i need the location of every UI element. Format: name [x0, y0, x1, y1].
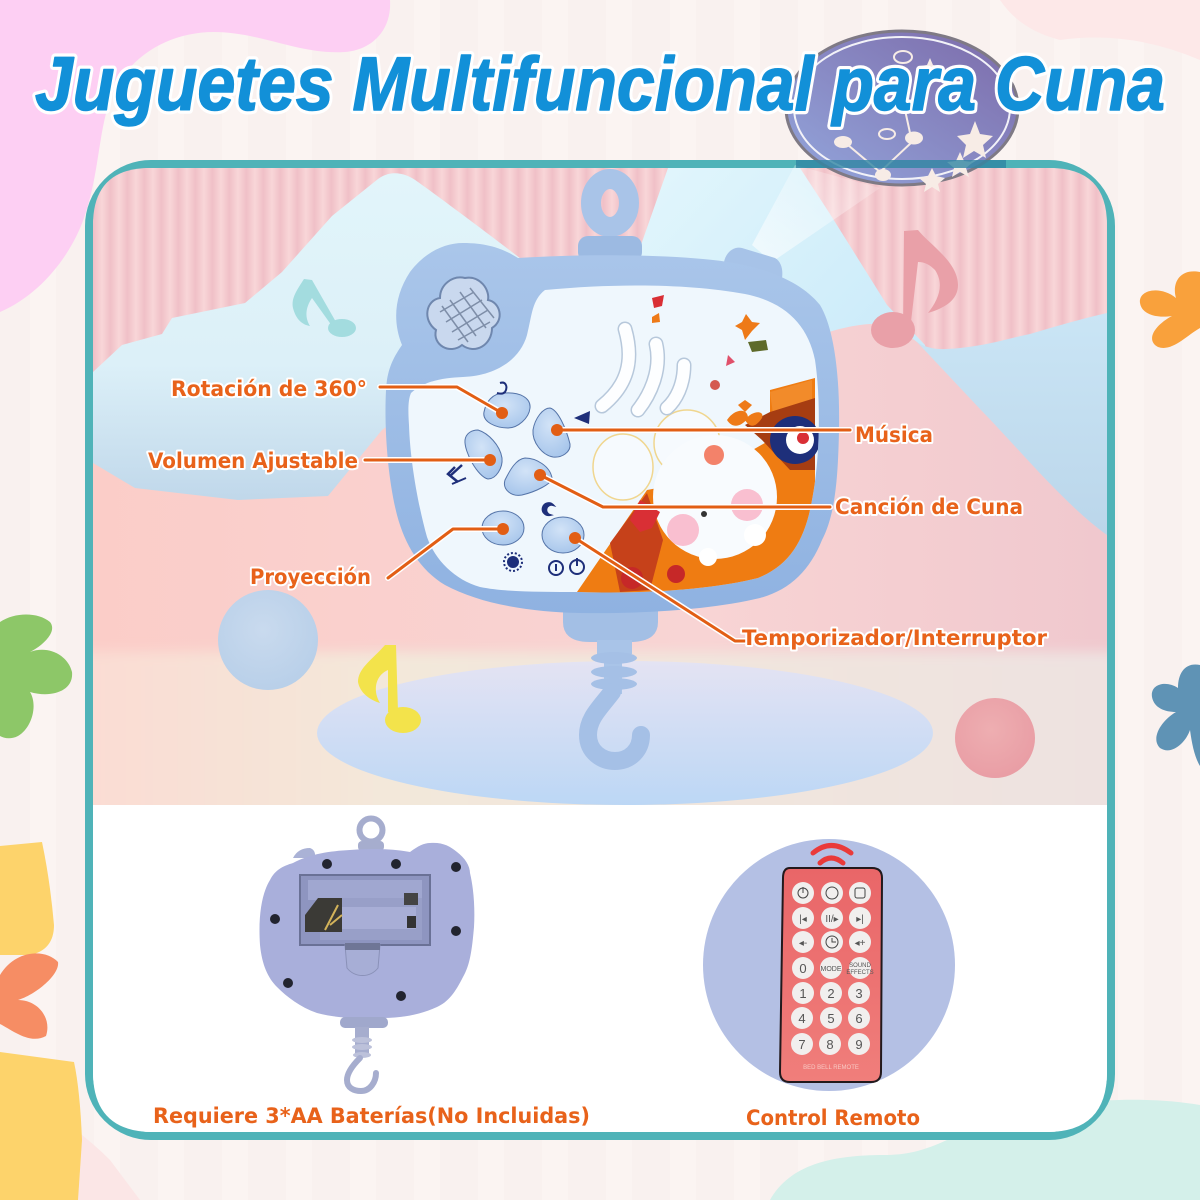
- toy: main body: [385, 243, 839, 613]
- toy: speaker flower grille: [427, 277, 500, 349]
- remote: body: ▸|: [856, 914, 864, 925]
- ball: pink: [955, 698, 1035, 778]
- icon: yellow music note: [358, 645, 421, 733]
- remote: body: 8: [826, 1037, 834, 1052]
- decorative blocks: yellow and orange left: [0, 842, 82, 1200]
- remote: body: BED BELL REMOTE: [803, 1065, 859, 1071]
- label: Rotación de 360°: Rotación de 360°: [171, 377, 367, 401]
- remote: body: MODE: [820, 966, 842, 973]
- remote: body: II/▸: [825, 914, 839, 925]
- decorative leaf: blue right: [1152, 664, 1200, 766]
- remote: signal arcs: [813, 846, 851, 863]
- decorative leaf: orange right: [1140, 271, 1200, 348]
- label: Temporizador/Interruptor: Temporizador/Interruptor: [742, 626, 1048, 650]
- icon: teal music note: [293, 279, 356, 337]
- icon: pink music note: [871, 230, 958, 348]
- remote: body: 1: [799, 986, 807, 1001]
- callout lines: orange strokes and dots: [365, 387, 850, 641]
- label: Canción de Cuna: Canción de Cuna: [835, 495, 1023, 519]
- decorative shape: pink blob top left: [0, 0, 390, 312]
- caption: batteries: Requiere 3*AA Baterías(No Incluidas): [153, 1104, 590, 1128]
- remote: body: 5: [827, 1011, 835, 1026]
- remote: body: SOUND: [849, 963, 871, 969]
- toy: lower hook: [563, 605, 658, 761]
- remote: body: 0: [799, 961, 807, 976]
- toy rear view: battery compartment: [259, 818, 474, 1091]
- remote: body: ◂+: [855, 938, 866, 949]
- teal frame overlap on projection: [796, 160, 1006, 168]
- remote: body: 6: [855, 1011, 863, 1026]
- callout lines: [365, 387, 850, 641]
- remote: lavender circle: [703, 839, 955, 1091]
- remote: body: [780, 868, 882, 1082]
- remote: body: 2: [827, 986, 835, 1001]
- remote: body: 4: [798, 1011, 806, 1026]
- illustration: star projection circle: [786, 31, 1018, 192]
- toy: control buttons: [465, 393, 584, 553]
- panel: teal frame: [89, 164, 1111, 1136]
- scene: pastel room background: [80, 168, 1120, 822]
- remote: body: EFFECTS: [846, 970, 874, 976]
- table: round pedestal: [317, 661, 933, 805]
- caption: remote: Control Remoto: [746, 1106, 920, 1130]
- toy: speaker slots: [602, 329, 684, 410]
- toy: hanging ring: [578, 179, 642, 262]
- decorative leaf: green left: [0, 614, 72, 738]
- ball: blue: [218, 590, 318, 690]
- toy: projector knob: [724, 248, 782, 283]
- label: Proyección: Proyección: [250, 565, 371, 589]
- remote: body: ◂-: [799, 938, 807, 949]
- decorative shape: teal blob bottom right: [770, 1100, 1200, 1200]
- label: Volumen Ajustable: Volumen Ajustable: [148, 449, 358, 473]
- toy: button icons: [448, 383, 590, 575]
- label: Música: Música: [855, 423, 933, 447]
- remote: body: 7: [798, 1037, 806, 1052]
- remote: body: |◂: [799, 914, 807, 925]
- remote: body: 9: [855, 1037, 863, 1052]
- panel: white lower area: [93, 805, 1107, 1132]
- remote: body: 3: [855, 986, 863, 1001]
- beam: projector light: [752, 165, 880, 262]
- toy: autumn illustration: [577, 295, 820, 600]
